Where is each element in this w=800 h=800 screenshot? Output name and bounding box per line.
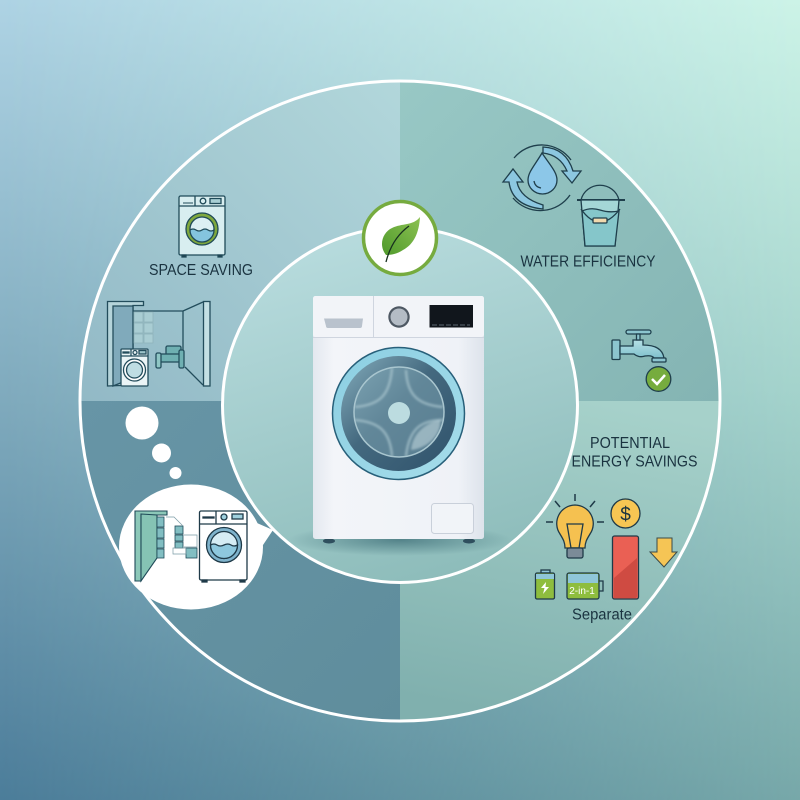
label: separate: Separate: [572, 606, 632, 624]
icon: faucet with check: [612, 330, 671, 391]
callout: speech bubble: [119, 484, 273, 610]
panel: outer ring with four quadrants: [80, 81, 720, 721]
icon: leaf badge: [364, 202, 436, 274]
machine shadow: [288, 524, 512, 556]
icon: bucket: [577, 185, 625, 246]
outer ring outline: [80, 81, 720, 721]
icon: 2-in-1 bar: [567, 573, 603, 599]
machine body: [313, 296, 484, 539]
icon: armchair: [156, 346, 184, 368]
icon: small washer: [179, 196, 225, 257]
heading: potential energy savings: POTENTIAL: [590, 435, 670, 452]
icon: washer in bubble: [200, 511, 247, 582]
panel: energy savings quadrant: [400, 401, 720, 721]
machine feet: [323, 538, 475, 544]
icon: light bulb: [546, 494, 604, 558]
bar: separate energy use: [612, 536, 638, 599]
icon: compact cabinet: [135, 511, 197, 581]
icon: laundry room: [108, 302, 210, 386]
filter hatch: [432, 504, 474, 534]
icon: 2-in-1 bar: 2-in-1: [569, 586, 595, 597]
panel: space saving quadrant: [80, 81, 400, 401]
panel: centre circle: [222, 228, 578, 582]
heading: potential energy savings: ENERGY SAVINGS: [572, 454, 698, 470]
washing machine: [288, 296, 512, 556]
icon: dollar coin: [611, 499, 640, 528]
panel: water efficiency quadrant: [400, 81, 720, 401]
control panel: [313, 296, 484, 338]
heading: space saving: SPACE SAVING: [149, 262, 253, 279]
icon: green check: [646, 367, 671, 391]
door: [332, 348, 464, 480]
icon: dollar coin: $: [620, 504, 631, 526]
thought bubbles: [126, 406, 182, 479]
icon: down arrow: [650, 538, 677, 567]
icon: battery: [536, 570, 554, 599]
panel: compact comparison quadrant: [80, 401, 400, 721]
icon: washer in room: [121, 349, 148, 386]
heading: water efficiency: WATER EFFICIENCY: [520, 254, 656, 270]
icon: water cycle with drop: [503, 145, 581, 211]
heading: potential energy savings: [572, 435, 698, 470]
